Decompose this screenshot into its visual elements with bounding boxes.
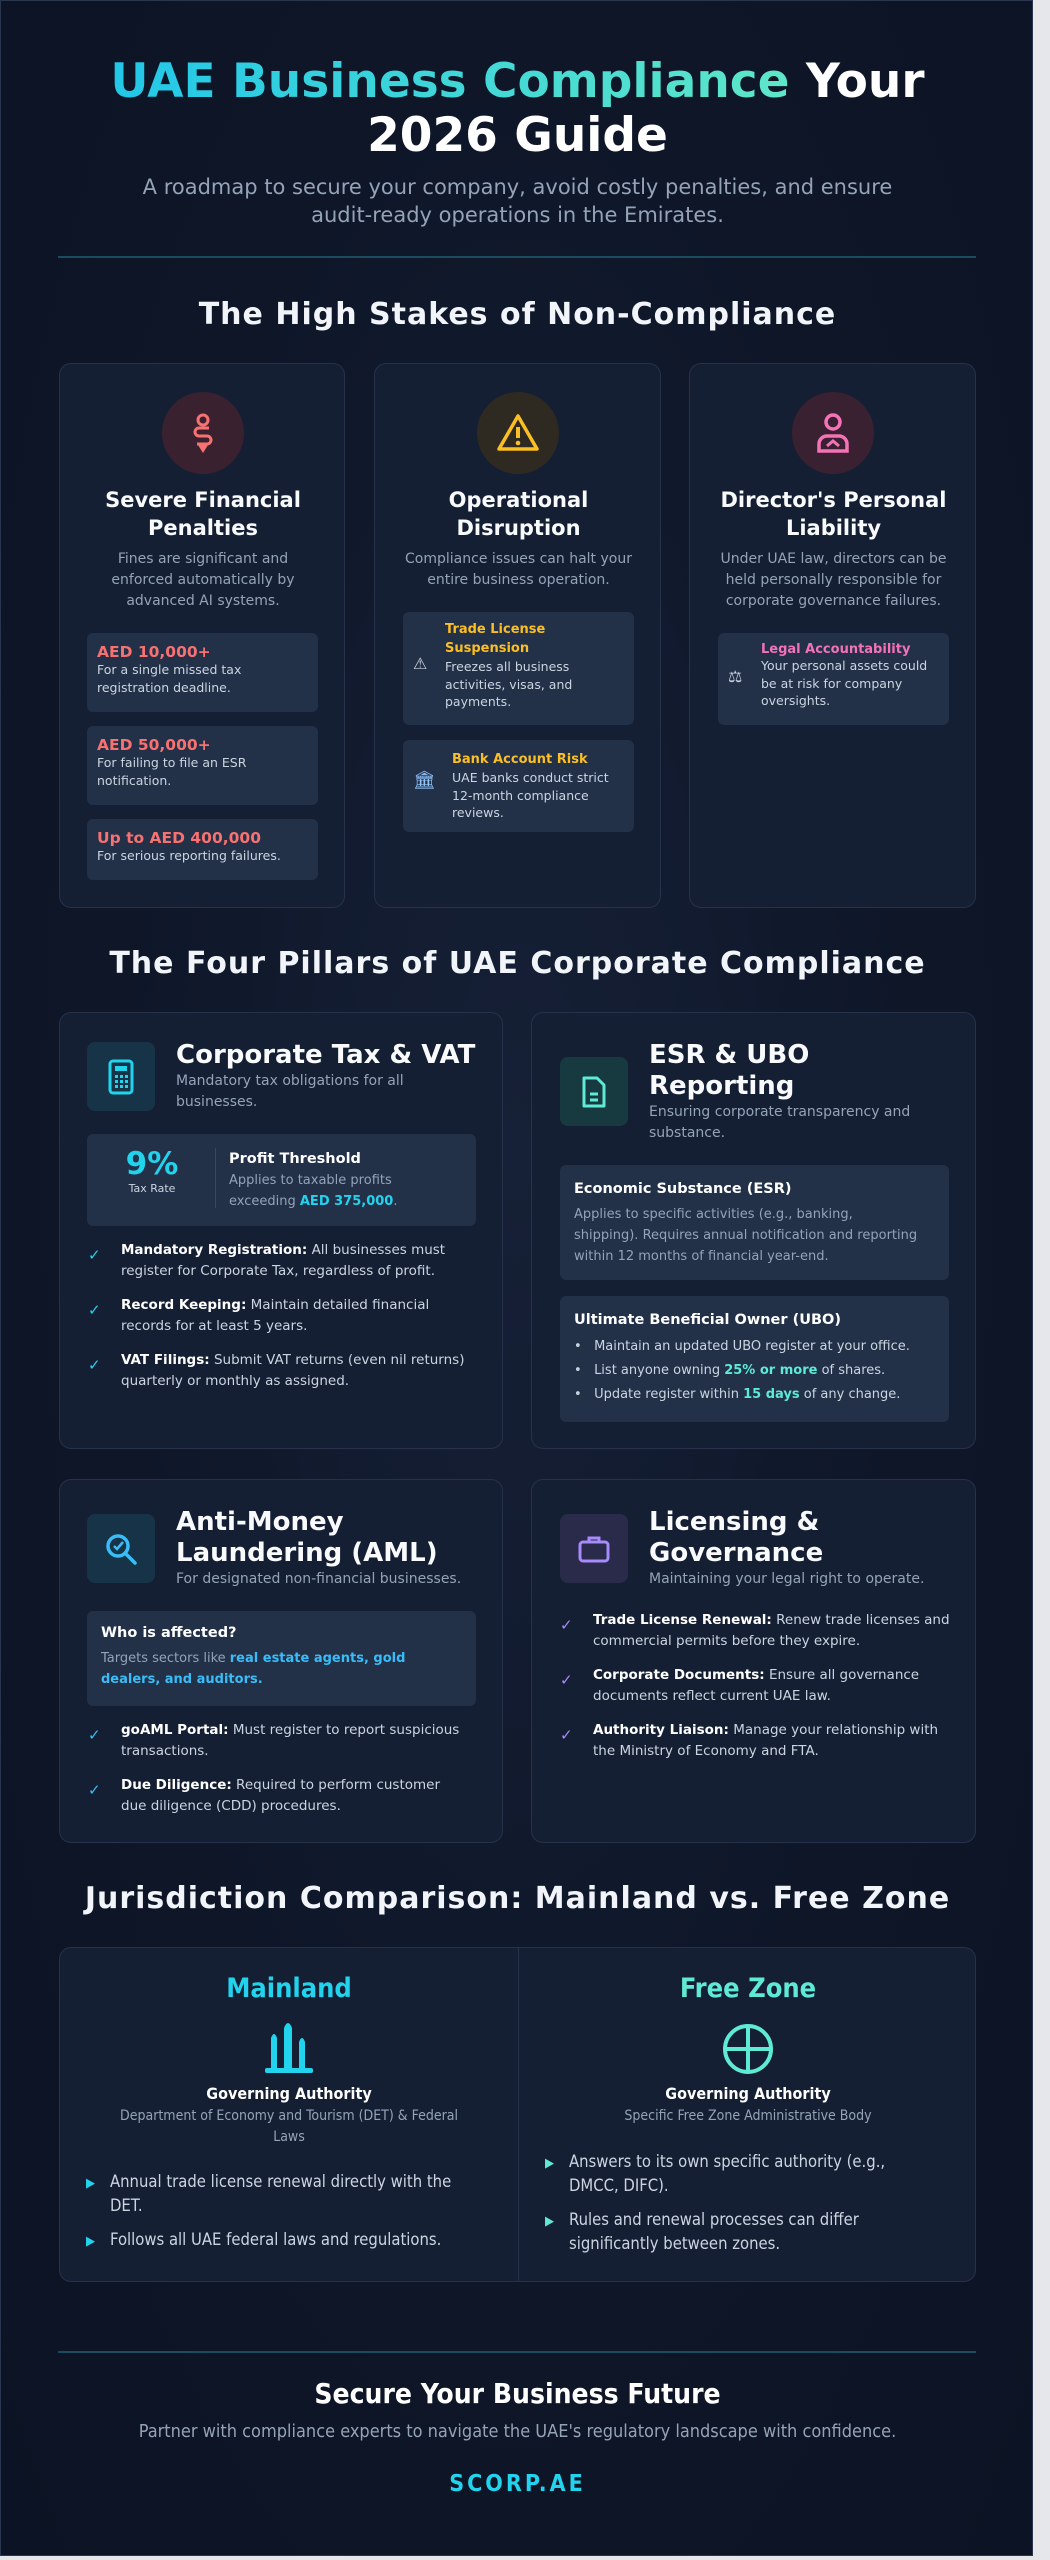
pillar title: Anti-Money [176,1507,344,1537]
icon: search [87,1514,155,1583]
subtitle: A roadmap to secure your company, avoid costly penalties, and ensure [143,175,892,199]
item: documents: Corporate Documents: Ensure all governance documents reflect current UAE law. [593,1667,919,1704]
brand: SCORP.AE [449,2471,586,2497]
card description: Fines are significant and enforced automatically by advanced AI systems. [111,551,295,609]
card title: Liability [786,516,881,540]
fine 1: For a single missed tax registration deadline. [97,662,241,694]
card description: Under UAE law, directors can be held personally responsible for corporate governance failures. [721,551,946,609]
legal accountability: Legal Accountability [761,642,910,657]
card title: Operational [449,488,588,512]
pillar title: Mandatory tax obligations for all businesses. [176,1073,404,1110]
item: record keeping: Record Keeping: Maintain detailed financial records for at least 5 years. [121,1297,429,1334]
item: registration: ✓ [88,1246,101,1264]
bullets: ▶ [86,2234,95,2249]
pillar title [649,1040,910,1141]
risk: license suspension: Freezes all business activities, visas, and payments. [445,659,572,709]
item: license renewal: Trade License Renewal: Renew trade licenses and commercial permits before they expire. [593,1612,950,1649]
item: documents: ✓ [560,1671,573,1689]
risk: bank account: Bank Account Risk [452,752,588,767]
who affected box: Who is affected? [101,1625,236,1641]
pillar title: Ensuring corporate transparency and substance. [649,1104,910,1141]
item: vat: VAT Filings: Submit VAT returns (even nil returns) quarterly or monthly as assigned. [121,1352,464,1389]
who affected box: Targets sectors like real estate agents, gold dealers, and auditors. [101,1651,405,1687]
card title: Penalties [148,516,258,540]
card title: Director's Personal [720,488,946,512]
legal accountability: ⚖ [728,667,742,686]
stat box: 9%: 9% [126,1146,178,1182]
risk: license suspension: Trade License Suspension [445,622,545,656]
bullets [545,2152,885,2253]
card title [449,488,588,540]
item: record keeping: ✓ [88,1301,101,1319]
item: goAML: ✓ [88,1726,101,1744]
fine 3 [87,819,318,880]
risk: bank account [403,740,634,832]
pillar title: Laundering (AML) [176,1538,438,1568]
title: UAE Business Compliance Your [110,54,925,109]
UBO box: Ultimate Beneficial Owner (UBO) [574,1312,841,1328]
icon: person [792,392,874,474]
pillar title: Licensing & [649,1507,819,1537]
item: goAML: goAML Portal: Must register to report suspicious transactions. [121,1722,459,1759]
item: liaison: Authority Liaison: Manage your relationship with the Ministry of Economy and FTA. [593,1722,938,1759]
fine 3: For serious reporting failures. [97,848,281,863]
icon: briefcase [560,1514,628,1583]
ESR box: Economic Substance (ESR) [574,1181,792,1197]
item: due diligence: Due Diligence: Required to perform customer due diligence (CDD) procedures. [121,1777,440,1814]
who affected box [87,1611,476,1706]
UBO box [560,1296,949,1422]
stat box: 9% [87,1134,476,1226]
item: vat: ✓ [88,1356,101,1374]
card title: Disruption [456,516,581,540]
panel: director liability [689,363,976,908]
pillar title [176,1507,461,1587]
bullets: Annual trade license renewal directly with the DET. [110,2172,451,2215]
card title [720,488,946,540]
column: free zone [545,1973,885,2253]
column: mainland: Department of Economy and Tourism (DET) & Federal Laws [120,2108,458,2145]
panel: operational disruption [374,363,661,908]
legal accountability [718,633,949,725]
icon: calculator [87,1042,155,1111]
icon: towers [265,2023,313,2073]
card title: Severe Financial [105,488,301,512]
heading: high stakes: The High Stakes of Non-Compliance [199,297,836,332]
title: 2026 Guide [367,108,668,163]
ESR box: Applies to specific activities (e.g., banking, shipping). Requires annual notification and reporting within 12 months of financial year-end. [574,1207,917,1264]
card description: Compliance issues can halt your entire business operation. [405,551,632,588]
footer text: Partner with compliance experts to navigate the UAE's regulatory landscape with confidence. [139,2421,896,2442]
risk: bank account: 🏛 [413,770,436,791]
icon: money [162,392,244,474]
icon: globe [723,2024,773,2074]
risk: license suspension [403,612,634,725]
item: liaison: ✓ [560,1726,573,1744]
subtitle [142,175,892,227]
subtitle: audit-ready operations in the Emirates. [311,203,724,227]
pillar title: Governance [649,1538,823,1568]
fine 2 [87,726,318,805]
legal accountability: Your personal assets could be at risk for company oversights. [761,658,927,708]
fine 2: AED 50,000+ [97,736,211,754]
risk: license suspension: ⚠ [413,654,427,673]
card title [105,488,301,540]
title [110,54,925,163]
UBO box: • Maintain an updated UBO register at your office. [574,1339,910,1354]
fine 1 [87,633,318,712]
panel: licensing [531,1479,976,1843]
column: free zone: Specific Free Zone Administrative Body [624,2108,872,2124]
icon: warning [477,392,559,474]
pillar title: ESR & UBO [649,1040,809,1070]
column: mainland: Governing Authority [206,2084,372,2103]
icon: document [560,1057,628,1126]
pillar title [649,1507,924,1587]
fine 2: For failing to file an ESR notification. [97,755,246,788]
fine 3: Up to AED 400,000 [97,829,261,847]
bullets [86,2172,451,2249]
column: free zone: Governing Authority [665,2084,831,2103]
bullets: Follows all UAE federal laws and regulations. [110,2230,441,2249]
bullets: Answers to its own specific authority (e.g., DMCC, DIFC). [569,2152,885,2195]
pillar title: Corporate Tax & VAT [176,1040,475,1070]
bullets: ▶ [545,2214,554,2229]
pillar title: For designated non-financial businesses. [176,1571,461,1587]
column: free zone: Free Zone [680,1973,816,2004]
heading: four pillars: The Four Pillars of UAE Corporate Compliance [109,946,926,981]
stat box: 9%: Tax Rate [129,1182,175,1195]
footer heading: Secure Your Business Future [314,2377,721,2410]
panel: corporate tax [59,1012,503,1449]
risk: bank account: UAE banks conduct strict 12-month compliance reviews. [452,770,609,820]
UBO box: • Update register within 15 days of any change. [574,1387,900,1402]
pillar title: Maintaining your legal right to operate. [649,1571,924,1587]
ESR box [560,1165,949,1280]
column: mainland: Mainland [226,1973,352,2004]
bullets: ▶ [545,2156,554,2171]
fine 1: AED 10,000+ [97,643,211,661]
stat box: 9%: Profit Threshold [229,1151,361,1167]
panel: financial penalties [59,363,345,908]
panel: AML [59,1479,503,1843]
panel: ESR & UBO [531,1012,976,1449]
item: registration: Mandatory Registration: All businesses must register for Corporate Tax, regardless of profit. [121,1242,445,1279]
bullets: Rules and renewal processes can differ significantly between zones. [569,2210,859,2253]
item: due diligence: ✓ [88,1781,101,1799]
heading: jurisdiction: Jurisdiction Comparison: Mainland vs. Free Zone [85,1881,950,1916]
panel: comparison [59,1947,976,2282]
pillar title: Reporting [649,1071,794,1101]
stat box: 9%: Applies to taxable profits exceeding AED 375,000. [229,1173,398,1209]
item: license renewal: ✓ [560,1616,573,1634]
pillar title [176,1040,476,1110]
UBO box: • List anyone owning 25% or more of shares. [574,1363,885,1378]
bullets: ▶ [86,2176,95,2191]
column: mainland [86,1973,458,2249]
